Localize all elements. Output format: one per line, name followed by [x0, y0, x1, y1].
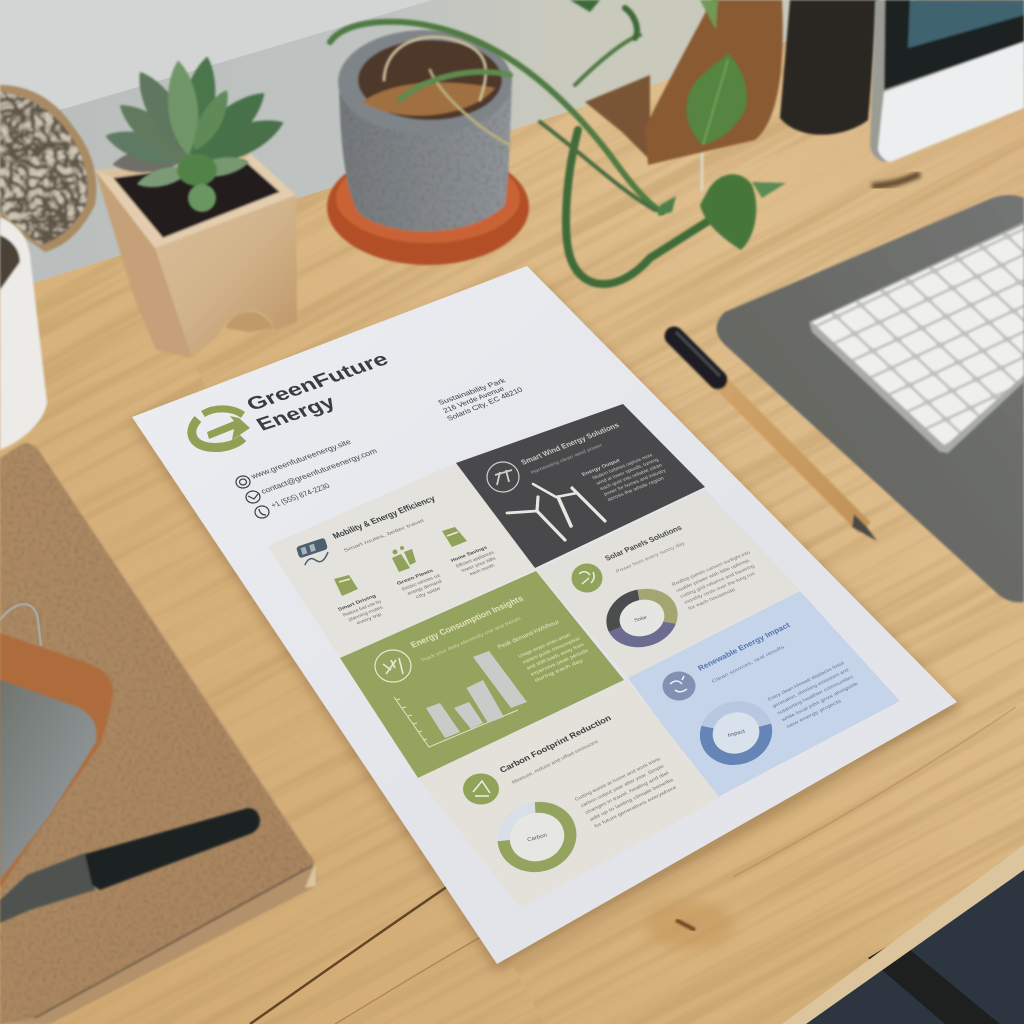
column two text: Green Fleets	[396, 568, 435, 587]
title: company name	[243, 349, 393, 435]
body text: wind: Modern turbines capture more	[591, 452, 655, 481]
body text: carbon: changes in travel, heating and diet	[584, 770, 671, 816]
wooden square succulent pot	[95, 153, 297, 358]
contact details: www.greenfutureenergy.site	[248, 437, 353, 481]
donut chart: solar: Solar	[634, 615, 648, 623]
grey mouse pad	[716, 195, 1024, 602]
kraft notebook	[0, 443, 317, 1024]
contact details: +1 (555) 874-2230	[269, 481, 332, 510]
body text: solar: monthly costs over the long run	[683, 571, 757, 606]
column two text: Electric vehicles cut	[401, 573, 442, 592]
body text: renewable: while local jobs grow alongside	[781, 681, 860, 723]
donut chart: carbon: Carbon	[527, 833, 548, 843]
subheading: mobility: Smart routes, better travel	[343, 518, 425, 554]
panel: smart wind energy solutions	[456, 404, 705, 568]
body text: consumption: and shift loads away from	[525, 642, 586, 671]
body text: consumption: during each day	[534, 658, 585, 683]
panel: mobility and energy efficiency	[268, 463, 536, 658]
body text: wind: each gust into reliable clean	[599, 463, 664, 492]
body text: wind: across the whole region	[606, 476, 666, 503]
body text: renewable: supporting healthier communities	[776, 674, 856, 716]
trailing green vine and leaves	[330, 8, 710, 284]
decorative brown globe	[0, 85, 96, 252]
heading: mobility: Mobility & Energy Efficiency	[331, 494, 437, 541]
address block: 216 Verde Avenue	[441, 384, 506, 415]
green pothos leaves	[570, 0, 786, 250]
icon: carbon circle	[463, 774, 499, 804]
icon: solar circle	[572, 564, 602, 592]
column two text: city wide	[415, 586, 443, 600]
wooden sculpture	[585, 0, 783, 165]
desktop monitor	[870, 0, 1024, 162]
body text: solar: usable power with little upkeep,	[675, 558, 752, 594]
column two text: energy demand	[406, 579, 444, 597]
white keyboard	[809, 222, 1024, 453]
body text: consumption: Peak demand kWh/hour	[496, 619, 561, 651]
grey tablet	[0, 680, 97, 880]
address block	[436, 376, 524, 423]
contact details	[248, 437, 379, 510]
column one text: Smart Driving	[337, 593, 378, 613]
succulent plant	[102, 54, 289, 212]
panel: carbon footprint reduction	[418, 680, 720, 908]
white pot on the left	[0, 217, 47, 450]
donut chart: renewable	[700, 700, 772, 766]
paper shadow	[132, 272, 962, 972]
heading: wind: Smart Wind Energy Solutions	[519, 421, 621, 467]
body text: carbon: add up to lasting climate benefits	[589, 777, 676, 823]
column three text: Home Savings	[450, 545, 489, 564]
icon: green document one	[334, 575, 358, 596]
icon: battery	[296, 538, 331, 568]
bar chart	[394, 651, 527, 747]
icon: green document two	[442, 527, 467, 547]
subheading: renewable: Clean sources, real results	[711, 644, 787, 685]
contact icons	[236, 476, 269, 518]
address block: Solaris City, EC 48210	[445, 385, 524, 423]
body text: consumption: expensive peak periods	[530, 648, 590, 677]
notebook clip	[0, 604, 41, 646]
icon: wind circle	[487, 462, 519, 492]
panel: solar panels solutions	[536, 489, 800, 678]
body text: carbon: for future generations everywhere	[593, 785, 678, 829]
black marker	[0, 808, 260, 923]
donut chart: solar	[608, 588, 676, 648]
body text: consumption: meters guide consumption	[521, 636, 582, 665]
body text: carbon: Cutting waste at home and work trims	[574, 756, 662, 803]
column one text: planning routes	[347, 605, 385, 623]
body text: wind: wind at lower speeds, turning	[595, 457, 660, 486]
dark jar	[780, 0, 878, 135]
body text: carbon: carbon output year after year. Simple	[579, 763, 666, 809]
desk front edge	[782, 845, 1024, 1024]
panel: renewable energy impact	[628, 591, 900, 798]
donut chart: renewable: Impact	[727, 729, 746, 739]
icon: renewable circle	[662, 672, 696, 700]
icon: gift package	[392, 546, 416, 572]
column one text: every trip	[356, 612, 384, 626]
donut chart: carbon	[497, 800, 577, 874]
body text: consumption: Usage drops when smart	[517, 632, 572, 659]
back wall	[0, 0, 917, 290]
subheading: consumption: Track your daily electricity use and trends	[420, 616, 523, 664]
icon: consumption circle	[375, 650, 411, 682]
body text: solar: Rooftop panels convert sunlight into	[671, 550, 752, 588]
heading: renewable: Renewable Energy Impact	[696, 620, 792, 673]
body text: renewable: new energy projects	[785, 698, 843, 730]
body text: renewable: Every clean kilowatt displaces fossil	[767, 661, 845, 703]
dark chair under the desk	[803, 868, 1024, 1024]
column three text: Efficient appliances	[455, 550, 496, 569]
body text: solar: for each household	[687, 587, 737, 612]
body text: solar: cutting grid reliance and lowering	[679, 563, 756, 600]
orange card	[0, 633, 113, 888]
concrete pot on orange saucer	[327, 30, 529, 265]
infographic sheet	[132, 266, 957, 964]
address block: Sustainability Park	[436, 376, 508, 407]
subheading: wind: Harnessing clean wind power	[530, 442, 604, 476]
heading: solar: Solar Panels Solutions	[603, 523, 684, 563]
body text: wind: power for homes and industry	[603, 468, 668, 497]
body text: renewable: generation, shrinking emissions and	[771, 667, 851, 709]
heading: consumption: Energy Consumption Insights	[409, 594, 525, 650]
column three text: each month	[469, 563, 496, 577]
contact details: contact@greenfutureenergy.com	[259, 447, 379, 496]
body text: wind: Energy Output	[581, 458, 622, 478]
title: company name: Energy	[253, 392, 340, 435]
logo: GreenFuture mark	[192, 409, 250, 448]
title: company name: GreenFuture	[243, 349, 393, 415]
column one text: Reduce fuel use by	[342, 599, 383, 618]
column three text: lower your bills	[460, 556, 498, 574]
heading: carbon: Carbon Footprint Reduction	[498, 714, 613, 775]
subheading: solar: Power from every sunny day	[615, 541, 687, 575]
subheading: carbon: Measure, reduce and offset emissions	[511, 739, 600, 786]
panel: energy consumption insights	[340, 571, 624, 778]
pen	[674, 332, 877, 541]
illustration: wind turbines	[507, 484, 605, 540]
